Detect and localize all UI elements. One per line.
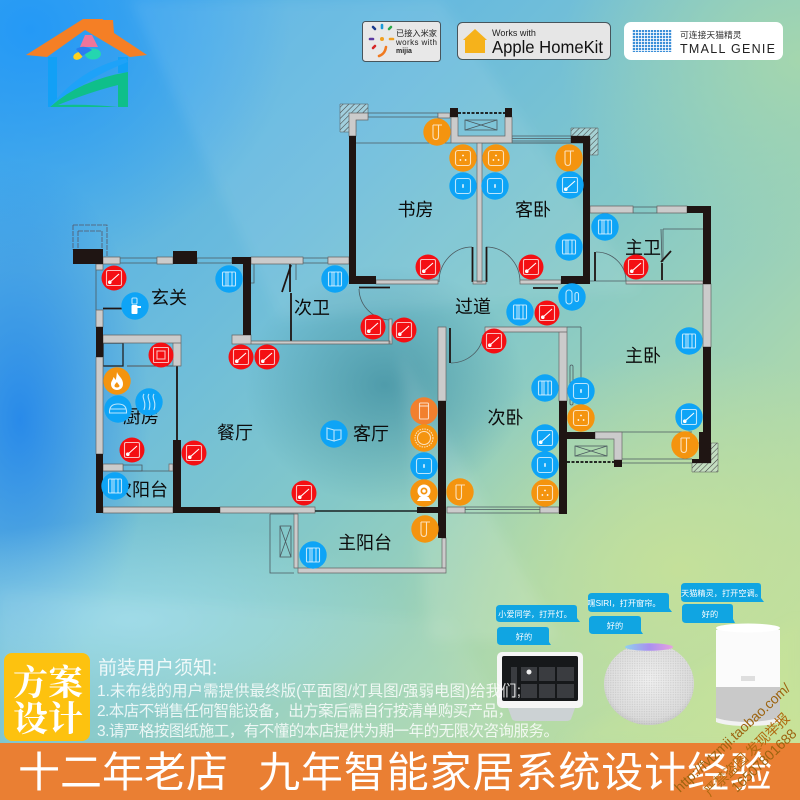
room labels: 玄关 xyxy=(151,288,187,308)
speech bubble: Xiaoai command: 小爱同学，打开灯。 xyxy=(498,609,572,619)
air conditioner kitchen xyxy=(104,395,132,423)
speech bubble: Siri command: 嘿SIRI，打开窗帘。 xyxy=(587,598,661,608)
badge: mijia xyxy=(362,22,440,62)
bottom orange banner: 十二年老店 xyxy=(18,749,228,796)
speech bubble: Genie reply: 好的 xyxy=(702,609,718,619)
blue switch master xyxy=(675,403,703,431)
speech bubble: Xiaoai reply xyxy=(497,627,551,645)
socket study xyxy=(449,144,477,172)
room labels: 客厅 xyxy=(353,424,389,444)
light switch study xyxy=(416,254,440,280)
curtain second bedroom xyxy=(531,374,559,402)
light switch living xyxy=(292,480,316,506)
tv control living xyxy=(320,420,348,448)
light switch dining 1 xyxy=(228,344,254,370)
badge: mijia: works with xyxy=(395,38,437,47)
speech bubble: Xiaoai command xyxy=(496,605,580,622)
light switch kitchen xyxy=(120,438,144,462)
floor plan xyxy=(73,104,718,573)
light switch hall 2 xyxy=(392,318,416,342)
info living xyxy=(410,452,438,480)
device: Tmall Genie speaker xyxy=(716,624,780,726)
light switch master bath xyxy=(624,254,648,280)
room labels: 主卫 xyxy=(625,238,661,258)
watermark: 严禁盗图 发现举报 xyxy=(701,710,793,799)
shower icon study xyxy=(423,118,451,146)
light switch dining wall xyxy=(182,440,206,466)
curtain guest xyxy=(555,233,583,261)
socket guest xyxy=(482,144,510,172)
light switch hall 1 xyxy=(360,314,386,340)
light switch dining 2 xyxy=(254,344,280,370)
socket second bedroom xyxy=(531,479,559,507)
room labels: 次阳台 xyxy=(114,480,168,500)
shower second bedroom xyxy=(446,478,474,506)
watermark: http://fvtzmji.taobao.com/ xyxy=(671,680,793,795)
door arcs xyxy=(359,247,626,363)
pre-installation notes: 前装用户须知: xyxy=(98,657,217,679)
logo: smart home house xyxy=(26,19,147,107)
badge: Apple HomeKit xyxy=(458,22,610,60)
badge: Apple HomeKit: Works with xyxy=(492,28,536,38)
bottom orange banner xyxy=(0,743,800,800)
speech bubble: Genie command xyxy=(681,583,764,602)
window frames and thin lines xyxy=(120,113,657,513)
shower master xyxy=(671,431,699,459)
badge: Tmall Genie xyxy=(624,22,783,60)
info second bedroom xyxy=(531,451,559,479)
speech bubble: Siri reply: 好的 xyxy=(607,620,623,630)
device: HomePod mini xyxy=(604,643,694,725)
gray walls xyxy=(96,113,711,573)
socket master xyxy=(567,404,595,432)
scheme design badge xyxy=(4,653,90,741)
speech bubble: Genie command: 天猫精灵，打开空调。 xyxy=(681,588,763,598)
badge: Tmall Genie: TMALL GENIE xyxy=(680,42,775,56)
blue switch second bedroom xyxy=(531,424,559,452)
curtain entry xyxy=(215,265,243,293)
badge: mijia: mijia xyxy=(396,48,412,55)
curtain main balcony xyxy=(299,541,327,569)
bottom orange banner: 九年智能家居系统设计经验 xyxy=(258,749,772,796)
speech bubble: Siri command xyxy=(587,593,672,612)
shower guest xyxy=(555,144,583,172)
info master xyxy=(567,377,595,405)
info study xyxy=(449,172,477,200)
watermark: 16507801688 xyxy=(728,725,800,795)
kitchen panel xyxy=(148,342,174,368)
curtain master bath xyxy=(591,213,619,241)
room labels: 次卧 xyxy=(488,408,524,428)
room labels: 书房 xyxy=(398,200,434,220)
speech bubble: Xiaoai reply: 好的 xyxy=(516,632,532,642)
room labels: 主卧 xyxy=(625,346,661,366)
icon markers xyxy=(101,118,703,569)
scheme design badge: 方案 xyxy=(13,663,83,703)
light switch guest xyxy=(518,254,544,280)
curtain master xyxy=(675,327,703,355)
scheme design badge: 设计 xyxy=(13,700,83,739)
gas flame sensor xyxy=(103,367,131,395)
room labels: 主阳台 xyxy=(338,533,392,553)
heating xyxy=(135,388,163,416)
wall panel living xyxy=(410,397,438,425)
pre-installation notes xyxy=(97,657,559,740)
light switch entry xyxy=(102,266,126,290)
door sensor hallway xyxy=(558,283,586,311)
round speaker living xyxy=(410,424,438,452)
shower main balcony xyxy=(411,515,439,543)
room labels: 次卫 xyxy=(294,298,330,318)
curtain second balcony xyxy=(101,472,129,500)
light switch second bedroom xyxy=(482,328,506,354)
badge: Apple HomeKit: Apple HomeKit xyxy=(492,37,603,57)
hatches xyxy=(340,104,718,472)
black walls xyxy=(73,108,711,538)
pre-installation notes: 2.本店不销售任何智能设备，出方案后需自行按清单购买产品， xyxy=(97,702,513,720)
badge: Tmall Genie: 可连接天猫精灵 xyxy=(680,29,742,40)
pre-installation notes: 1.未布线的用户需提供最终版(平面图/灯具图/强弱电图)给我们; xyxy=(97,682,521,700)
room labels: 餐厅 xyxy=(217,423,253,443)
pre-installation notes: 3.请严格按图纸施工，有不懂的本店提供为期一年的无限次咨询服务。 xyxy=(97,722,559,740)
speech bubble: Siri reply xyxy=(589,616,643,634)
speech bubble: Genie reply xyxy=(682,604,735,623)
curtain hallway xyxy=(506,298,534,326)
room labels: 客卧 xyxy=(515,200,551,220)
badge: mijia: 已接入米家 xyxy=(396,28,437,38)
light switch hallway xyxy=(534,300,560,326)
device: smart display xyxy=(497,652,583,721)
room labels: 厨房 xyxy=(123,407,159,427)
info guest xyxy=(481,172,509,200)
blue switch guest xyxy=(556,171,584,199)
camera living xyxy=(410,479,438,507)
room labels: 过道 xyxy=(455,297,491,317)
smart lock entry xyxy=(121,292,149,320)
curtain second bath xyxy=(321,265,349,293)
room labels xyxy=(114,200,661,553)
